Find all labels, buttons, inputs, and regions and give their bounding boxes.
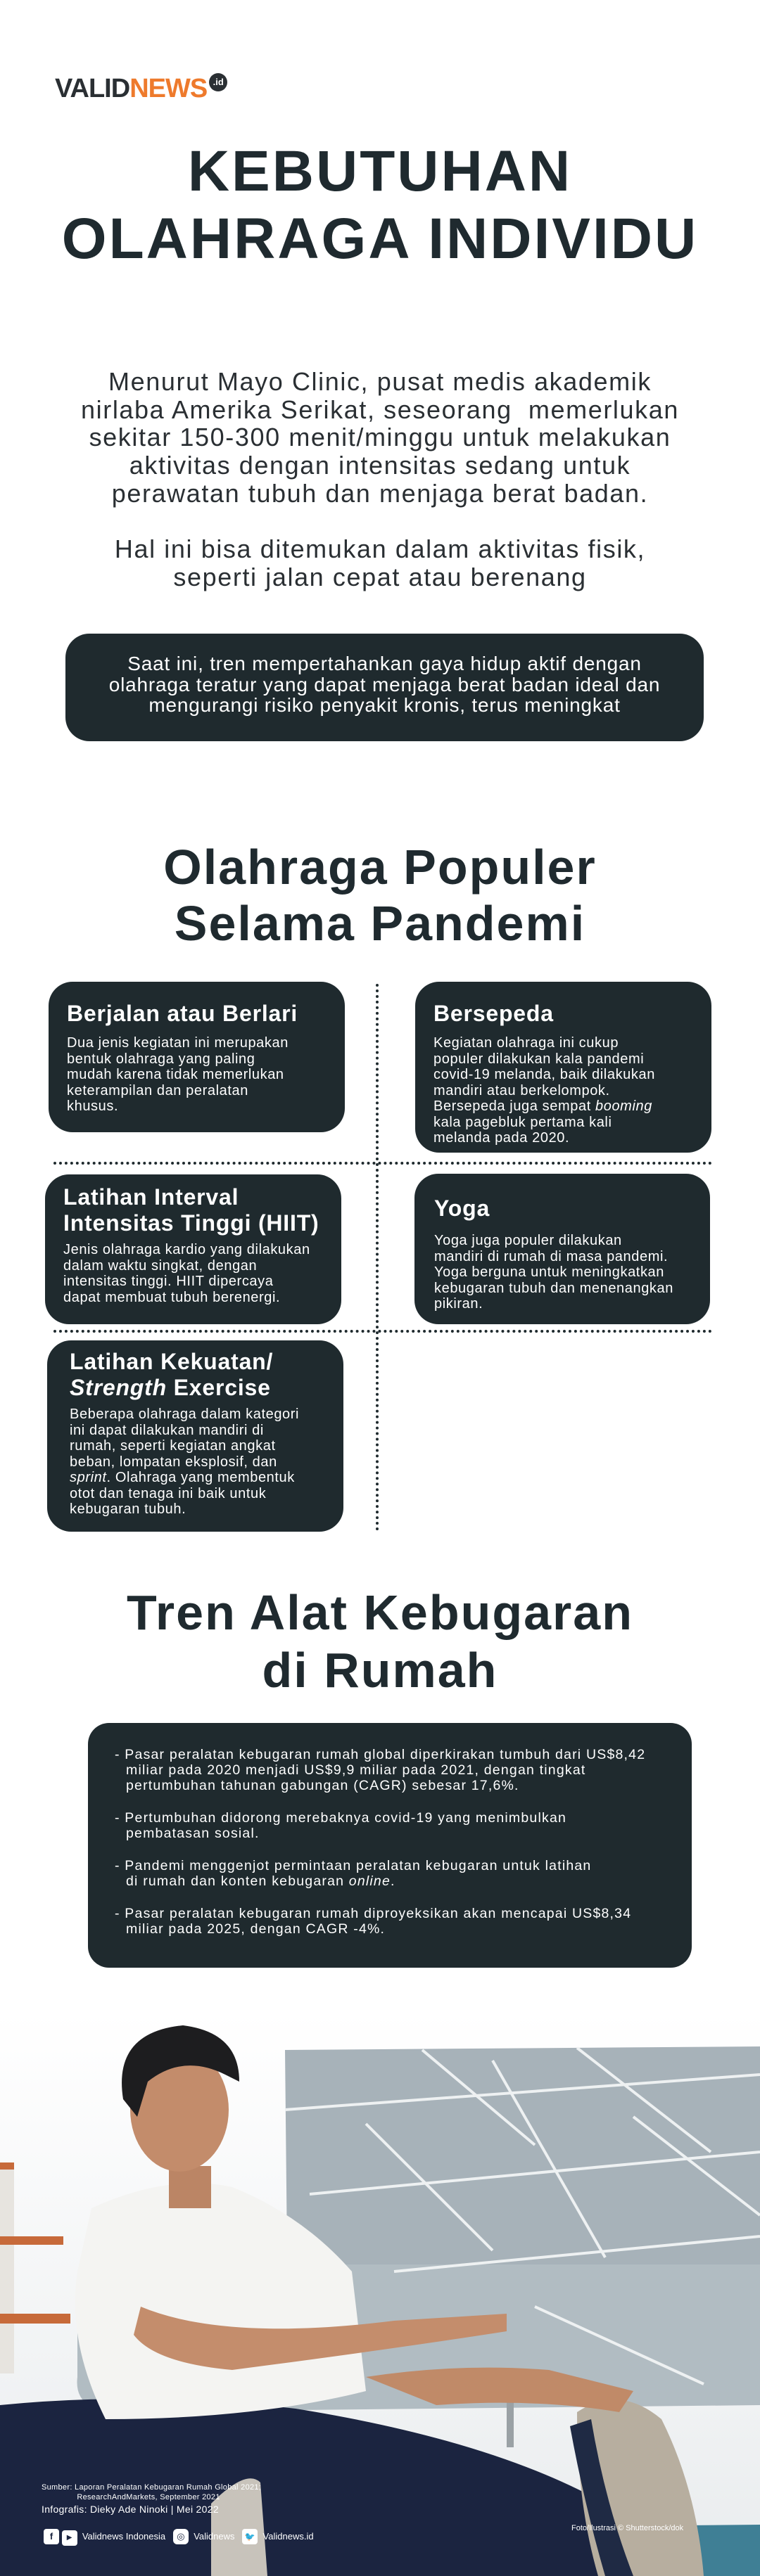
social media bar: 🐦: [245, 2532, 255, 2542]
panel: trend bullets: - Pertumbuhan didorong merebaknya covid-19 yang menimbulkan: [115, 1810, 566, 1826]
social media bar: ▶: [67, 2534, 72, 2542]
card: yoga: Yoga: [434, 1196, 490, 1221]
card: walking/running: khusus.: [67, 1098, 118, 1114]
card: cycling: Bersepeda: [433, 1001, 554, 1026]
panel: trend bullets: di rumah dan konten kebugaran online.: [126, 1873, 395, 1889]
intro text: sekitar 150-300 menit/minggu untuk melakukan: [89, 423, 671, 451]
card: cycling: melanda pada 2020.: [433, 1130, 569, 1146]
logo: .id: [213, 77, 224, 87]
heading: home fitness trend: [127, 1585, 633, 1698]
card: strength: sprint. Olahraga yang membentuk: [70, 1470, 295, 1485]
intro text: perawatan tubuh dan menjaga berat badan.: [112, 479, 648, 508]
card: strength: Latihan Kekuatan/: [70, 1349, 273, 1374]
card: walking/running: Dua jenis kegiatan ini merupakan: [67, 1035, 289, 1051]
title: [62, 139, 698, 271]
panel: trend bullets: [88, 1723, 692, 1968]
card: strength: otot dan tenaga ini baik untuk: [70, 1485, 266, 1501]
callout: trend: [65, 634, 704, 741]
footer credits: Sumber: Laporan Peralatan Kebugaran Rumah Global 2021;: [42, 2483, 261, 2492]
intro text: Menurut Mayo Clinic, pusat medis akademik: [108, 367, 652, 396]
callout: trend: olahraga teratur yang dapat menjaga berat badan ideal dan: [109, 674, 660, 695]
card: strength: rumah, seperti kegiatan angkat: [70, 1438, 276, 1454]
social media bar: ◎: [177, 2531, 185, 2542]
intro text: nirlaba Amerika Serikat, seseorang memerlukan: [81, 395, 679, 424]
card: yoga: kebugaran tubuh dan menenangkan: [434, 1280, 673, 1295]
card: walking/running: keterampilan dan peralatan: [67, 1083, 248, 1098]
dotted dividers: [376, 984, 379, 1531]
card: cycling: covid-19 melanda, baik dilakukan: [433, 1067, 655, 1082]
footer credits: [42, 2483, 261, 2515]
card: walking/running: Berjalan atau Berlari: [67, 1001, 298, 1026]
card: strength: kebugaran tubuh.: [70, 1501, 186, 1517]
card: HIIT: Latihan Interval: [63, 1184, 239, 1210]
intro text: Hal ini bisa ditemukan dalam aktivitas fisik,: [115, 534, 645, 563]
photo illustration: man stretching: [0, 2025, 760, 2576]
heading: popular sports: Selama Pandemi: [175, 896, 585, 951]
panel: trend bullets: - Pasar peralatan kebugaran rumah global diperkirakan tumbuh dari US$8,42: [115, 1747, 645, 1762]
card: HIIT: Intensitas Tinggi (HIIT): [63, 1210, 319, 1236]
social media bar: [44, 2529, 314, 2546]
card: strength: ini dapat dilakukan mandiri di: [70, 1422, 264, 1437]
social media bar: f: [50, 2531, 53, 2542]
heading: popular sports: [163, 840, 597, 951]
card: yoga: [414, 1174, 710, 1324]
title: OLAHRAGA INDIVIDU: [62, 207, 698, 271]
heading: home fitness trend: Tren Alat Kebugaran: [127, 1585, 633, 1640]
panel: trend bullets: - Pandemi menggenjot permintaan peralatan kebugaran untuk latihan: [115, 1858, 591, 1873]
card: strength: beban, lompatan eksplosif, dan: [70, 1454, 277, 1470]
card: cycling: mandiri atau berkelompok.: [433, 1083, 610, 1098]
card: HIIT: dalam waktu singkat, dengan: [63, 1257, 257, 1273]
panel: trend bullets: miliar pada 2025, dengan CAGR -4%.: [126, 1921, 385, 1937]
panel: trend bullets: miliar pada 2020 menjadi US$9,9 miliar pada 2021, dengan tingkat: [126, 1762, 586, 1778]
card: yoga: Yoga juga populer dilakukan: [434, 1233, 622, 1248]
logo: VALIDNEWS: [55, 74, 207, 103]
title: KEBUTUHAN: [188, 139, 572, 203]
card: yoga: mandiri di rumah di masa pandemi.: [434, 1249, 668, 1264]
card: HIIT: [45, 1174, 341, 1324]
card: cycling: populer dilakukan kala pandemi: [433, 1051, 644, 1066]
card: cycling: [415, 982, 711, 1153]
social media bar: Validnews Indonesia Validnews Validnews.id: [82, 2531, 314, 2542]
card: yoga: pikiran.: [434, 1296, 483, 1312]
intro text: seperti jalan cepat atau berenang: [173, 563, 587, 591]
card: yoga: Yoga berguna untuk meningkatkan: [434, 1264, 664, 1280]
card: cycling: Kegiatan olahraga ini cukup: [433, 1035, 619, 1051]
photo credit: Foto/Ilustrasi © Shutterstock/dok: [571, 2524, 683, 2532]
panel: trend bullets: - Pasar peralatan kebugaran rumah diproyeksikan akan mencapai US$8,34: [115, 1906, 631, 1921]
card: HIIT: dapat membuat tubuh berenergi.: [63, 1290, 280, 1305]
callout: trend: mengurangi risiko penyakit kronis, terus meningkat: [148, 694, 621, 716]
footer credits: Infografis: Dieky Ade Ninoki | Mei 2022: [42, 2504, 219, 2515]
card: HIIT: Jenis olahraga kardio yang dilakukan: [63, 1242, 310, 1257]
intro text: [81, 367, 679, 591]
card: walking/running: mudah karena tidak memerlukan: [67, 1067, 284, 1082]
card: strength: [47, 1340, 343, 1532]
heading: popular sports: Olahraga Populer: [163, 840, 597, 895]
panel: trend bullets: pertumbuhan tahunan gabungan (CAGR) sebesar 17,6%.: [126, 1778, 519, 1793]
card: walking/running: [49, 982, 345, 1132]
panel: trend bullets: pembatasan sosial.: [126, 1826, 260, 1841]
card: strength: Strength Exercise: [70, 1375, 271, 1400]
card: cycling: Bersepeda juga sempat booming: [433, 1098, 652, 1114]
card: HIIT: intensitas tinggi. HIIT dipercaya: [63, 1274, 273, 1289]
footer credits: ResearchAndMarkets, September 2021: [77, 2493, 220, 2501]
callout: trend: Saat ini, tren mempertahankan gaya hidup aktif dengan: [127, 653, 642, 674]
intro text: aktivitas dengan intensitas sedang untuk: [129, 451, 631, 480]
card: strength: Beberapa olahraga dalam kategori: [70, 1406, 299, 1422]
card: walking/running: bentuk olahraga yang paling: [67, 1051, 255, 1066]
card: cycling: kala pagebluk pertama kali: [433, 1114, 612, 1129]
heading: home fitness trend: di Rumah: [262, 1643, 498, 1698]
